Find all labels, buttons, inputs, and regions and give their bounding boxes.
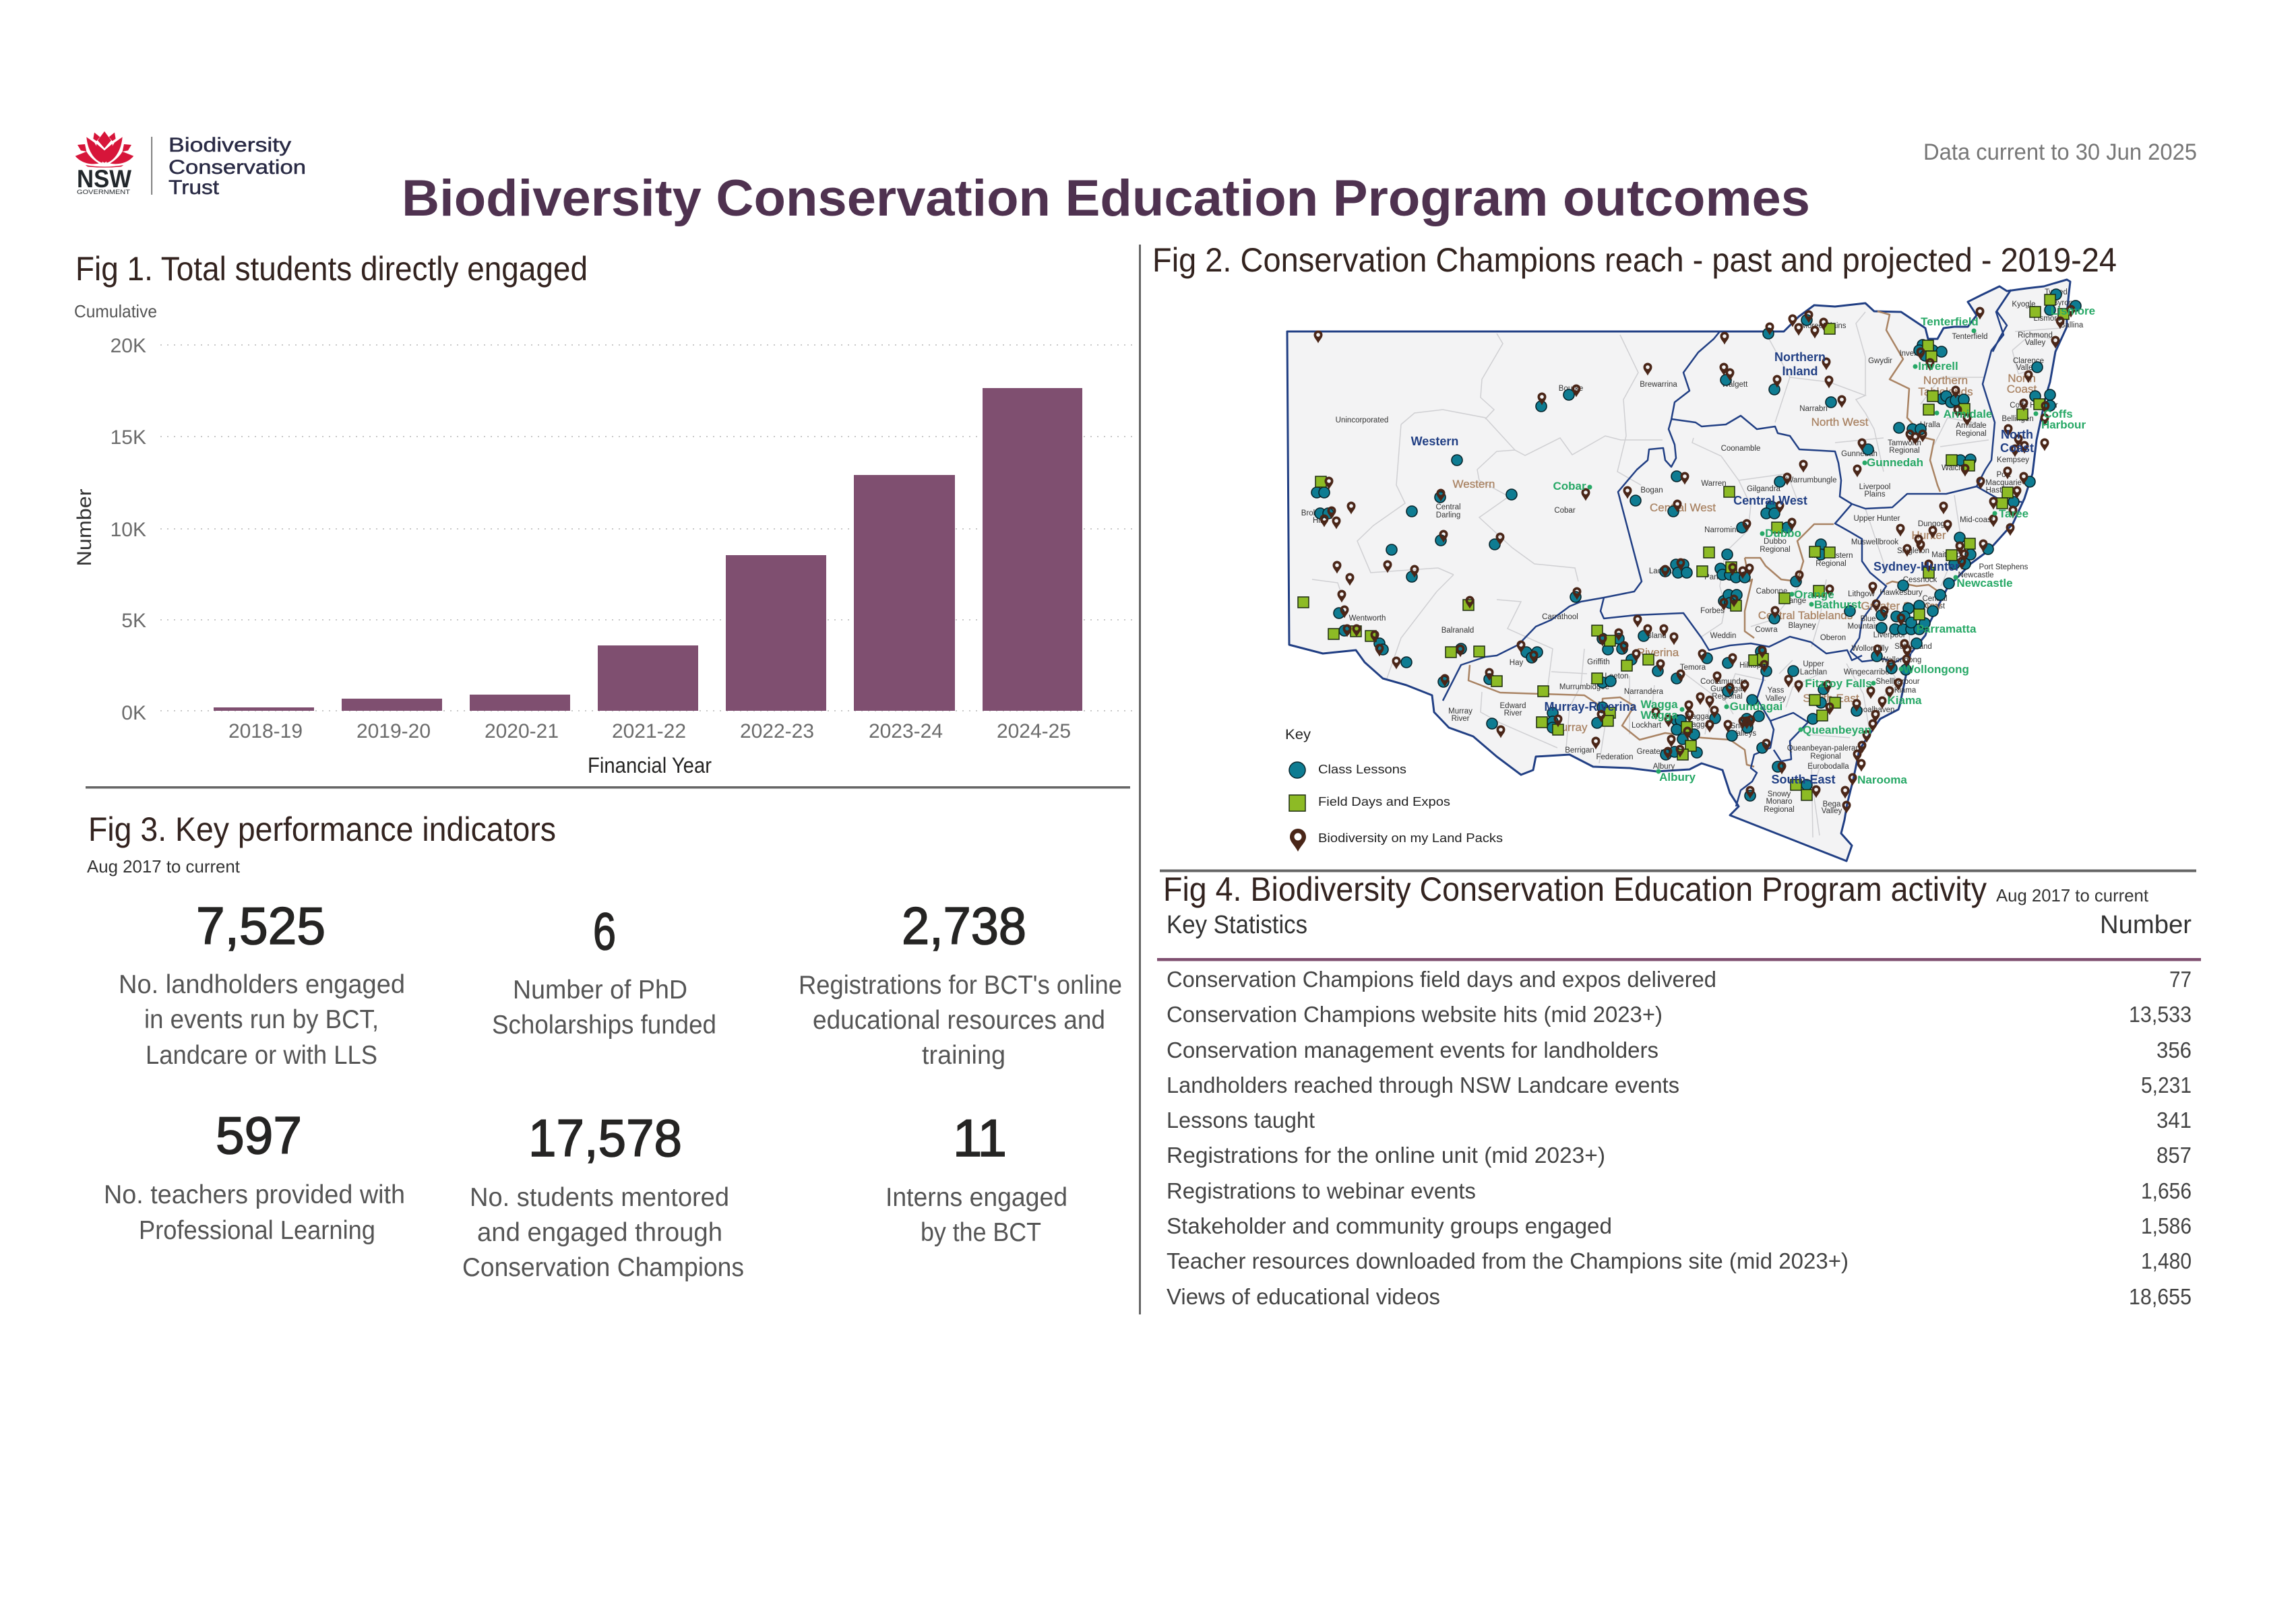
map: town labels: Kiama — [1887, 694, 1922, 707]
panel: Fig 1 bar chart — [73, 250, 1132, 777]
map: town labels: Gunnedah — [1867, 456, 1923, 469]
map: LGA labels: Valley — [2025, 339, 2045, 347]
map: local region boundaries — [1443, 290, 2022, 806]
map: LGA labels: Wagga — [1685, 713, 1710, 721]
map legend: Class Lessons — [1318, 763, 1406, 776]
KPI: students: No. students mentored — [470, 1183, 729, 1212]
map: LGA labels: Port — [1996, 471, 2011, 479]
map: LGA labels: Central — [1435, 503, 1461, 511]
map: LGA labels: Carrathool — [1542, 613, 1578, 621]
table rows: Lessons taught — [1167, 1108, 1315, 1133]
KPI: landholders — [119, 896, 405, 1070]
panel: Fig 2 map — [1152, 241, 2117, 861]
table header — [1167, 911, 2192, 939]
map: class lessons markers — [1311, 289, 2081, 801]
map: LGA boundaries — [1312, 312, 2061, 837]
map: LGA labels: Wagga — [1685, 721, 1710, 729]
map: LGA labels: Gundagai — [1710, 685, 1744, 693]
map: LGA labels: Narrabri — [1799, 405, 1828, 413]
map: LGA labels: Darling — [1436, 511, 1460, 519]
table rows: 18,655 — [2129, 1284, 2192, 1309]
title: Biodiversity Conservation Education Program outcomes — [402, 170, 1810, 227]
map: LLS region names: Northern — [1923, 374, 1968, 387]
map: LGA labels: River — [1504, 709, 1522, 718]
table rows: 356 — [2157, 1038, 2192, 1062]
map: town labels: Harbour — [2041, 418, 2086, 431]
map: LGA labels: Mid-coast — [1960, 516, 1994, 524]
map: town labels: Wagga — [1640, 709, 1678, 722]
map: local region names: Western — [1411, 435, 1458, 448]
KPI: students: and engaged through — [477, 1218, 722, 1247]
map: LLS region names: Greater Sydney — [1861, 600, 1942, 612]
logo: NSW Government / Biodiversity Conservation Trust — [75, 131, 306, 199]
x-axis labels: 2019-20 — [356, 720, 431, 742]
map: LGA labels: Plains — [1864, 490, 1886, 499]
map: LGA labels: Kyogle — [2012, 300, 2036, 309]
table rows: 13,533 — [2129, 1002, 2192, 1027]
map: LGA labels: Cessnock — [1903, 576, 1937, 584]
x-axis labels: 2022-23 — [740, 720, 814, 742]
map: local region names: North — [2001, 428, 2033, 441]
panel: Fig 3 key performance indicators — [87, 810, 1122, 1282]
KPI: registrations: educational resources and — [813, 1006, 1105, 1035]
map: LGA labels: Unincorporated — [1336, 416, 1388, 424]
map: LGA labels: Shellharbour — [1875, 678, 1920, 686]
map: LGA labels: Mid-Western — [1809, 552, 1853, 560]
KPI: landholders: No. landholders engaged — [119, 970, 405, 999]
map: LGA labels: Narrandera — [1624, 688, 1664, 696]
map legend: Biodiversity on my Land Packs — [1318, 831, 1503, 845]
subtitle: date range: Aug 2017 to current — [1996, 885, 2149, 905]
map: town labels: Coffs — [2043, 408, 2073, 420]
map: LGA labels: Weddin — [1710, 632, 1736, 640]
map: LGA labels: Warren — [1701, 480, 1727, 488]
panel: Fig 4 activity table — [1157, 870, 2201, 1309]
map: LLS region boundaries — [1468, 311, 1940, 767]
KPI: interns: Interns engaged — [886, 1183, 1067, 1212]
map: LGA labels: Lachlan — [1800, 668, 1827, 676]
map: LGA labels: Armidale — [1956, 422, 1987, 430]
map: town labels: Tenterfield — [1921, 315, 1979, 328]
map: LGA labels: Monaro — [1766, 798, 1793, 806]
map: NSW base shape — [1287, 280, 2070, 861]
table header: Number — [2100, 911, 2192, 939]
map: LGA labels: Hawkesbury — [1880, 589, 1923, 597]
map: LGA labels: Cootamundra — [1700, 678, 1747, 686]
logo: NSW Government / Biodiversity Conservation Trust: Biodiversity — [168, 134, 291, 156]
map: LGA labels: Wollongong — [1881, 656, 1921, 664]
heading: Fig 2: Fig 2. Conservation Champions reach - past and projected - 2019-24 — [1152, 241, 2117, 279]
map: LGA labels: Hill — [1313, 517, 1324, 525]
table rows: Registrations to webinar events — [1167, 1178, 1476, 1203]
map: LGA labels: Federation — [1596, 753, 1633, 761]
y-axis labels — [111, 335, 146, 724]
y-axis labels: 5K — [121, 610, 146, 632]
map: town labels: Taree — [1999, 507, 2028, 520]
map: town labels: Albury — [1659, 771, 1696, 784]
map: LGA labels: Uralla — [1920, 421, 1941, 429]
y-axis labels: 10K — [111, 519, 146, 541]
map: LGA labels: Dungog — [1918, 520, 1945, 528]
table rows: Teacher resources downloaded from the Champions site (mid 2023+) — [1167, 1248, 1849, 1273]
map: LGA labels: Brewarrina — [1640, 381, 1677, 389]
map: LGA labels: Liverpool — [1859, 483, 1890, 491]
KPI: registrations: Registrations for BCT's online — [799, 971, 1122, 1000]
map: town labels: Queanbeyan — [1803, 724, 1871, 736]
y-axis title: Number — [73, 488, 96, 566]
table rows — [1167, 967, 2192, 1309]
map: LLS region names: Riverina — [1637, 646, 1679, 659]
map: town labels: Narooma — [1857, 773, 1907, 786]
map: LGA labels: Wollondilly — [1852, 645, 1889, 653]
map legend: Field Days and Expos — [1318, 795, 1450, 808]
map: LGA labels: Walgett — [1722, 381, 1748, 389]
KPI: students: 17,578 — [528, 1108, 682, 1168]
map: LGA labels: Richmond — [2018, 331, 2053, 340]
logo: NSW Government / Biodiversity Conservation Trust: Trust — [168, 177, 220, 199]
map: town labels: Bathurst — [1814, 598, 1861, 611]
map: LGA labels: Bogan — [1640, 486, 1663, 495]
map: LGA labels: Gilgandra — [1747, 485, 1781, 493]
y-axis labels: 15K — [111, 426, 146, 449]
KPI: interns: 11 — [953, 1108, 1007, 1168]
map: LGA labels: Valley — [2016, 364, 2037, 372]
map: local region names: Sydney-Hunter — [1873, 560, 1960, 573]
map: LLS region names: Central Tablelands — [1758, 609, 1853, 622]
map: LLS region names: North — [2008, 372, 2036, 385]
map: town labels: Gundagai — [1730, 700, 1782, 713]
map: biodiversity on my land pack markers — [1314, 305, 2076, 814]
table rows: 1,480 — [2141, 1248, 2192, 1273]
map: LGA labels — [1301, 288, 2084, 815]
map: town labels: Fitzroy Falls — [1805, 677, 1872, 690]
map: LGA labels: Moree Plains — [1801, 322, 1847, 330]
map: LGA labels: Dubbo — [1764, 538, 1787, 546]
map: local region names: Central West — [1733, 494, 1807, 507]
map: local region names: Northern — [1774, 350, 1826, 364]
map: LGA labels: Bland — [1646, 632, 1667, 640]
map: town labels: Orange — [1794, 588, 1834, 601]
map: LGA labels: Tamworth — [1888, 439, 1921, 447]
subtitle: cumulative: Cumulative — [74, 301, 157, 321]
map: LGA labels: Maitland — [1931, 551, 1961, 559]
chart gridlines — [160, 345, 1132, 711]
map: LGA labels: Oberon — [1820, 634, 1846, 642]
map: LGA labels: Edward — [1500, 702, 1526, 710]
map: LGA labels: Byron — [2053, 299, 2073, 307]
KPI: PhD scholarships: Number of PhD — [513, 976, 687, 1005]
data currency note: Data current to 30 Jun 2025 — [1923, 139, 2197, 165]
map: LGA labels: Singleton — [1897, 547, 1929, 555]
KPI: interns — [886, 1108, 1067, 1247]
map: LLS region names: Hunter — [1911, 529, 1946, 542]
map: town labels: Newcastle — [1956, 577, 2013, 590]
map: town labels: Dubbo — [1765, 527, 1801, 540]
map: town labels: Wagga — [1640, 698, 1678, 711]
map: town labels: Wollongong — [1903, 663, 1969, 676]
map: LGA labels: Cowra — [1755, 626, 1778, 634]
map: LGA labels: Valley — [1766, 695, 1786, 703]
map: LGA labels: Regional — [1764, 806, 1795, 814]
map: LGA labels: Upper — [1803, 660, 1824, 668]
KPI: students: Conservation Champions — [462, 1253, 744, 1282]
KPI: PhD scholarships: 6 — [593, 901, 616, 961]
map: town labels: Cobar — [1553, 480, 1586, 492]
map: LGA labels: Valley — [1822, 807, 1842, 815]
map: LGA labels: Lockhart — [1632, 722, 1662, 730]
map: LGA labels: Regional — [1712, 693, 1743, 701]
map: LGA labels: Eurobodalla — [1807, 763, 1849, 771]
map: LGA labels: Bellingen — [2002, 415, 2034, 423]
map: LGA labels: Inverell — [1899, 350, 1925, 358]
map: field days and expos markers — [1298, 294, 2069, 800]
logo: NSW Government / Biodiversity Conservation Trust: Conservation — [168, 156, 306, 179]
map: LGA labels: Wentworth — [1349, 614, 1386, 623]
map: local region names: Coast — [2000, 441, 2034, 455]
map: LGA labels: Liverpool — [1873, 631, 1904, 639]
map: town labels: Inverell — [1918, 360, 1958, 373]
KPI: landholders: 7,525 — [196, 896, 325, 955]
table header: Key Statistics — [1167, 911, 1307, 939]
map: LGA labels: Yass — [1768, 687, 1785, 695]
map: LGA labels: Lithgow — [1848, 590, 1875, 598]
map: LGA labels: Regional — [1889, 447, 1920, 455]
map: town labels — [1553, 305, 2095, 786]
map: LGA labels: Regional — [1760, 546, 1791, 554]
map: LGA labels: Berrigan — [1565, 746, 1594, 755]
table rows: Conservation Champions website hits (mid 2023+) — [1167, 1002, 1663, 1027]
table rows: Stakeholder and community groups engaged — [1167, 1213, 1612, 1238]
map: LLS region names: North West — [1811, 416, 1869, 428]
map: LGA labels: Blue — [1860, 615, 1876, 623]
map: LGA labels: Mountains — [1847, 623, 1884, 631]
map: LGA labels: Coffs Harbour — [2010, 402, 2058, 410]
map: LGA labels: Hay — [1510, 659, 1523, 667]
map: LGA labels: Snowy — [1731, 722, 1754, 730]
map: town labels: Parramatta — [1917, 623, 1977, 635]
table rows: 341 — [2157, 1108, 2192, 1133]
map: LGA labels: Regional — [1810, 753, 1841, 761]
KPI: students — [462, 1108, 744, 1282]
map legend: Key — [1285, 727, 1311, 742]
map: LGA labels: Parkes — [1704, 573, 1729, 581]
KPI: registrations: training — [922, 1041, 1005, 1070]
heading: Fig 4: Fig 4. Biodiversity Conservation Education Program activity — [1163, 870, 1987, 908]
KPI: teachers: 597 — [216, 1106, 302, 1165]
map: local region names: Murray-Riverina — [1544, 700, 1638, 713]
map: LLS region names: Central West — [1650, 501, 1716, 514]
table rows: Conservation management events for landholders — [1167, 1038, 1658, 1062]
map: local region names: Inland — [1782, 364, 1818, 378]
map: LGA labels: Bega — [1823, 800, 1841, 808]
map: local region names — [1411, 350, 2034, 786]
map: LGA labels: Kempsey — [1997, 456, 2029, 464]
KPI: landholders: Landcare or with LLS — [146, 1041, 377, 1070]
map: LGA labels: Hilltops — [1739, 662, 1765, 670]
map: LGA labels: Murray — [1448, 707, 1472, 715]
map: LGA labels: Warrumbungle — [1786, 476, 1837, 484]
map: LGA labels: Lismore — [2034, 315, 2061, 323]
map: LGA labels: Gwydir — [1868, 357, 1892, 365]
map: LGA labels: Muswellbrook — [1851, 538, 1898, 546]
map: LGA labels: Sutherland — [1894, 643, 1932, 651]
map: LGA labels: Walcha — [1942, 464, 1968, 472]
map: LLS region names — [1453, 372, 2037, 734]
map: LGA labels: Forbes — [1700, 607, 1725, 615]
x-axis labels: 2020-21 — [485, 720, 559, 742]
table rows: 77 — [2169, 967, 2192, 992]
map: LGA labels: Newcastle — [1958, 571, 1994, 579]
map: LGA labels: Narromine — [1704, 526, 1741, 534]
table rows: Registrations for the online unit (mid 2023+) — [1167, 1143, 1605, 1168]
map: LGA labels: Lachlan — [1649, 567, 1676, 575]
map: LGA labels: Coonamble — [1721, 445, 1760, 453]
map: LLS region names: Western — [1453, 478, 1495, 490]
map: LGA labels: Kiama — [1894, 687, 1917, 695]
KPI: registrations: 2,738 — [902, 896, 1026, 955]
KPI: interns: by the BCT — [921, 1218, 1041, 1247]
map: town labels: Armidale — [1944, 408, 1992, 420]
KPI: registrations — [799, 896, 1122, 1070]
heading: Fig 3: Fig 3. Key performance indicators — [88, 810, 556, 848]
y-axis labels: 0K — [121, 702, 146, 724]
map: LGA labels: Port Stephens — [1979, 563, 2028, 571]
logo: NSW Government / Biodiversity Conservation Trust: GOVERNMENT — [77, 189, 130, 196]
map: LLS region names: Tablelands — [1918, 385, 1973, 398]
x-axis labels: 2024-25 — [997, 720, 1071, 742]
map: LGA labels: Macquarie- — [1985, 479, 2024, 487]
map legend — [1285, 727, 1503, 852]
map: LGA labels: Murrumbidgee — [1559, 683, 1609, 691]
map: LGA labels: River — [1452, 715, 1470, 723]
table rows: 857 — [2157, 1143, 2192, 1168]
map: LGA labels: Clarence — [2013, 357, 2044, 365]
map: LGA labels: Shoalhaven — [1854, 706, 1894, 714]
KPI: PhD scholarships — [492, 901, 716, 1040]
map: local region names: South-East — [1771, 773, 1836, 786]
map: LGA labels: Leeton — [1605, 672, 1629, 680]
map: LGA labels: Hastings — [1986, 486, 2016, 495]
bars — [214, 388, 1082, 711]
x-axis title: Financial Year — [588, 753, 712, 777]
map: LGA labels: Tenterfield — [1952, 333, 1988, 341]
map: LGA labels: Albury — [1653, 763, 1675, 771]
logo: NSW Government / Biodiversity Conservation Trust: NSW — [77, 165, 131, 193]
table rows: 1,586 — [2141, 1213, 2192, 1238]
table rows: 1,656 — [2141, 1178, 2192, 1203]
map: LGA labels: Tweed — [2045, 288, 2068, 296]
KPI: teachers: Professional Learning — [139, 1216, 375, 1245]
map: LGA labels: Balranald — [1441, 627, 1474, 635]
table rows: Conservation Champions field days and expos delivered — [1167, 967, 1716, 992]
map: LGA labels: Gunnedah — [1841, 450, 1878, 458]
y-axis labels: 20K — [111, 335, 146, 357]
map: LGA labels: Blayney — [1789, 622, 1816, 630]
map: LGA labels: Coast — [1925, 602, 1946, 610]
KPI: landholders: in events run by BCT, — [144, 1005, 379, 1034]
map: LGA labels: Cabonne — [1756, 587, 1787, 596]
heading: Fig 1: Fig 1. Total students directly engaged — [75, 250, 588, 288]
table rows: 5,231 — [2141, 1073, 2192, 1097]
map: LGA labels: Central — [1922, 595, 1948, 603]
map: LGA labels: Regional — [1956, 430, 1987, 438]
map: town labels: Lismore — [2051, 305, 2095, 317]
map: LGA labels: Orange — [1780, 597, 1806, 605]
map: LGA labels: Wingecarribee — [1844, 668, 1894, 676]
map: LGA labels: Upper Hunter — [1853, 515, 1900, 523]
map: LGA labels: Valleys — [1732, 730, 1756, 738]
x-axis labels: 2018-19 — [228, 720, 303, 742]
subtitle: date range: Aug 2017 to current — [87, 856, 241, 877]
KPI: PhD scholarships: Scholarships funded — [492, 1011, 716, 1040]
map: LGA labels: Bourke — [1559, 385, 1583, 393]
map: LGA labels: Snowy — [1768, 790, 1791, 798]
map: LGA labels: Regional — [1816, 560, 1847, 568]
map: LLS region names: Coast — [2007, 383, 2037, 395]
map: LLS region names: South East — [1803, 692, 1859, 705]
map: LGA labels: Griffith — [1587, 658, 1610, 666]
table rows: Landholders reached through NSW Landcare events — [1167, 1073, 1679, 1097]
map: LGA labels: Cobar — [1554, 507, 1576, 515]
map: LGA labels: Queanbeyan-palerang — [1787, 744, 1864, 753]
x-axis labels: 2023-24 — [869, 720, 943, 742]
map: LGA labels: Temora — [1680, 664, 1706, 672]
map: LGA labels: Greater Hume — [1637, 748, 1685, 756]
x-axis labels: 2021-22 — [612, 720, 686, 742]
x-axis labels — [228, 720, 1071, 742]
map: LGA labels: Ballina — [2060, 321, 2084, 329]
map: LGA labels: Broken — [1301, 509, 1326, 517]
KPI: teachers — [104, 1106, 405, 1245]
KPI: teachers: No. teachers provided with — [104, 1180, 405, 1209]
table rows: Views of educational videos — [1167, 1284, 1440, 1309]
map: LLS region names: Murray — [1552, 721, 1588, 734]
